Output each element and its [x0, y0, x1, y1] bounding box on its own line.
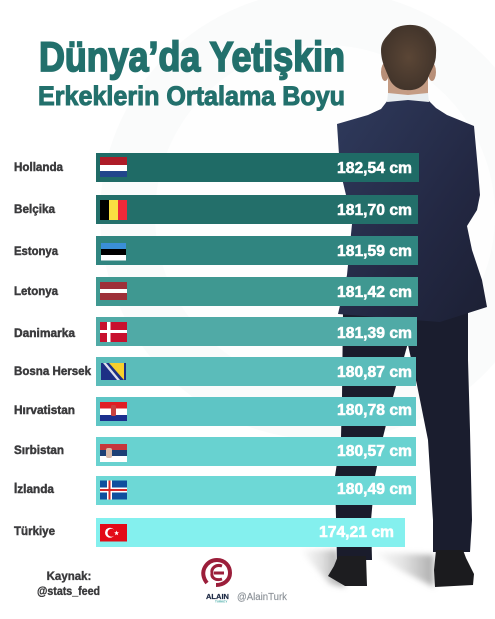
flag: Croatia: [100, 402, 127, 421]
flag: Bosnia and Herzegovina: [101, 363, 126, 380]
photo: man from behind: [300, 25, 487, 587]
logo: Alain Turk: @AlainTurk: [237, 592, 288, 603]
row: Danimarka: Danimarka: [14, 326, 75, 340]
row: Sırbistan: Sırbistan: [14, 443, 64, 457]
title: Dünya’da Yetişkin: [39, 33, 345, 80]
flag: Belgium: [100, 200, 127, 220]
head and hair: [381, 25, 436, 90]
row: Türkiye: Türkiye: [14, 524, 55, 538]
row: Bosna Hersek: Bosna Hersek: [14, 364, 91, 378]
row: Hollanda: Hollanda: [14, 160, 63, 174]
title: [38, 33, 345, 111]
jacket: [337, 100, 487, 322]
flag: Serbia: [100, 444, 127, 462]
logo: Alain Turk: ALAIN: [206, 592, 229, 601]
row: Bosna Hersek: 180,87 cm: [337, 364, 412, 381]
row: Sırbistan: [14, 437, 416, 466]
row: Estonya: [14, 236, 418, 265]
source note: Kaynak:: [47, 571, 91, 583]
left shoe: [328, 556, 367, 586]
row: İzlanda: İzlanda: [14, 481, 54, 496]
logo: Alain Turk: [203, 560, 288, 604]
row: Bosna Hersek: [14, 357, 416, 386]
row: Letonya: [14, 277, 418, 306]
logo mark: [203, 560, 230, 585]
row: Estonya: Estonya: [14, 244, 58, 258]
row: Letonya: Letonya: [14, 284, 58, 298]
flag: Netherlands: [100, 157, 127, 177]
row: Letonya: 181,42 cm: [337, 284, 412, 301]
flag: Iceland: [100, 480, 127, 500]
row: Hollanda: [14, 153, 419, 182]
row: Estonya: 181,59 cm: [337, 243, 412, 260]
flag: Denmark: [100, 322, 127, 342]
logo: Alain Turk: TURKEY: [215, 600, 227, 604]
right leg: [408, 312, 472, 552]
row: Belçika: 181,70 cm: [337, 202, 412, 219]
ears: [381, 63, 436, 81]
row: İzlanda: [14, 476, 416, 505]
neck: [388, 72, 428, 96]
row: Hırvatistan: [14, 397, 416, 426]
floor shadows: [300, 550, 434, 587]
row: Sırbistan: 180,57 cm: [337, 443, 412, 460]
row: Danimarka: [14, 317, 417, 346]
collar: [387, 93, 429, 102]
right shoe: [434, 550, 474, 587]
row: Hırvatistan: 180,78 cm: [337, 402, 412, 419]
flag: Latvia: [100, 282, 127, 300]
row: Belçika: Belçika: [14, 202, 55, 216]
row: Hollanda: 182,54 cm: [337, 160, 412, 177]
row: Türkiye: 174,21 cm: [319, 524, 394, 541]
left leg: [335, 312, 417, 560]
row: Türkiye: [14, 518, 405, 547]
flag: Turkey: [100, 524, 127, 542]
source note: @stats_feed: [37, 586, 100, 598]
flag: Estonia: [101, 243, 126, 260]
row: Belçika: [14, 195, 418, 224]
row: İzlanda: 180,49 cm: [337, 481, 412, 498]
row: Danimarka: 181,39 cm: [337, 325, 412, 342]
row: Hırvatistan: Hırvatistan: [14, 403, 75, 417]
source note: [37, 571, 100, 598]
title: Erkeklerin Ortalama Boyu: [38, 81, 345, 111]
